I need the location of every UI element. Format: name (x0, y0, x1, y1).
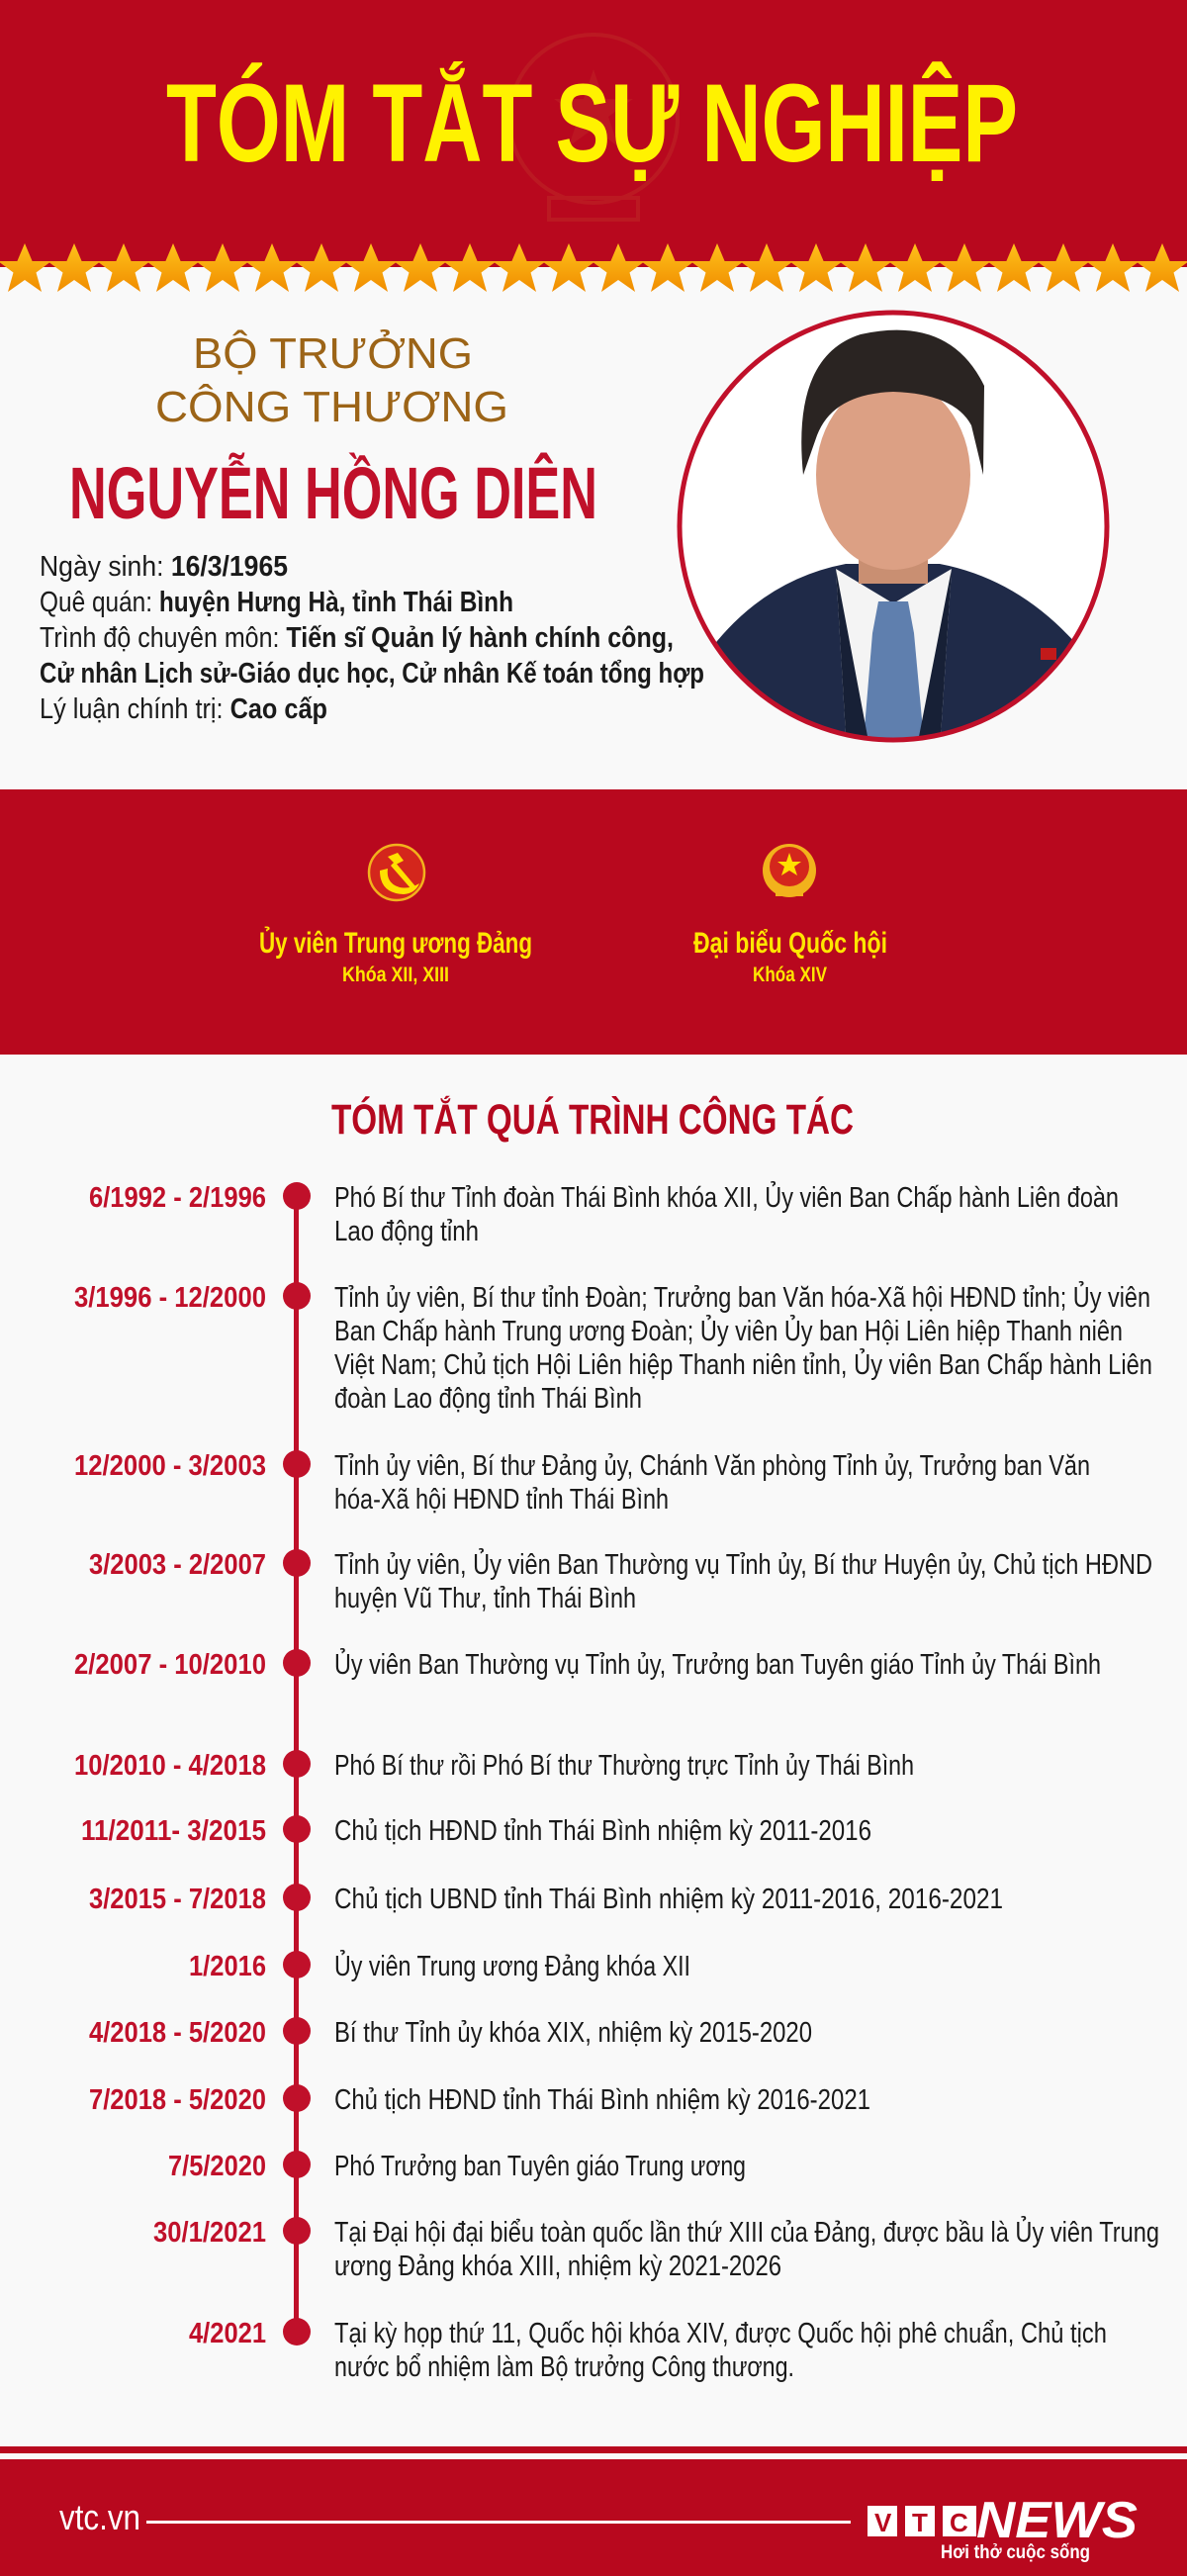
timeline descriptions: Lao động tỉnh (334, 1216, 479, 1247)
timeline descriptions (334, 1180, 1159, 2383)
label: party: Ủy viên Trung ương Đảng (259, 926, 532, 960)
portrait photo (680, 313, 1113, 752)
label: national assembly: Đại biểu Quốc hội (693, 927, 887, 960)
timeline descriptions: ương Đảng khóa XIII, nhiệm kỳ 2021-2026 (334, 2251, 781, 2282)
timeline descriptions: nước bổ nhiệm làm Bộ trưởng Công thương. (334, 2351, 794, 2383)
site url: vtc.vn (59, 2497, 140, 2537)
timeline dates: 3/2015 - 7/2018 (89, 1884, 266, 1915)
label: party: Khóa XII, XIII (342, 964, 449, 986)
name: NGUYỄN HỒNG DIÊN (69, 452, 597, 534)
titles band (0, 789, 1187, 1055)
label: party (259, 926, 532, 986)
personal info: Lý luận chính trị: Cao cấp (40, 693, 327, 725)
logo: VTC News: Hơi thở cuộc sống (941, 2542, 1090, 2563)
header band (0, 0, 1187, 267)
icon: party emblem (369, 845, 424, 900)
personal info: Trình độ chuyên môn: Tiến sĩ Quản lý hành chính công, (40, 622, 674, 654)
timeline dates: 3/2003 - 2/2007 (89, 1549, 266, 1581)
star row (0, 243, 1187, 292)
timeline dates: 11/2011- 3/2015 (81, 1815, 266, 1847)
logo: VTC News: V (874, 2508, 892, 2537)
position heading: BỘ TRƯỞNG (193, 327, 473, 378)
section heading: TÓM TẮT QUÁ TRÌNH CÔNG TÁC (331, 1095, 854, 1144)
label: national assembly: Khóa XIV (753, 964, 827, 986)
timeline descriptions: Bí thư Tỉnh ủy khóa XIX, nhiệm kỳ 2015-2020 (334, 2017, 812, 2049)
timeline dates: 4/2021 (189, 2318, 266, 2349)
personal info: Ngày sinh: 16/3/1965 (40, 551, 288, 583)
timeline descriptions: Ủy viên Trung ương Đảng khóa XII (334, 1949, 690, 1982)
timeline descriptions: hóa-Xã hội HĐND tỉnh Thái Bình (334, 1484, 669, 1516)
timeline dates: 30/1/2021 (153, 2217, 266, 2249)
timeline dates: 4/2018 - 5/2020 (89, 2017, 266, 2049)
personal info: Quê quán: huyện Hưng Hà, tỉnh Thái Bình (40, 587, 513, 618)
timeline dates: 2/2007 - 10/2010 (74, 1649, 266, 1681)
logo: VTC News: C (950, 2508, 968, 2537)
logo: VTC News: T (912, 2508, 928, 2537)
timeline dates: 10/2010 - 4/2018 (74, 1750, 266, 1782)
timeline descriptions: đoàn Lao động tỉnh Thái Bình (334, 1383, 642, 1415)
timeline dates (74, 1182, 266, 2349)
timeline descriptions: huyện Vũ Thư, tỉnh Thái Bình (334, 1583, 636, 1614)
watermark emblem (509, 35, 678, 220)
position heading (155, 327, 508, 431)
position heading: CÔNG THƯƠNG (155, 382, 508, 431)
timeline dates: 7/2018 - 5/2020 (89, 2084, 266, 2116)
timeline descriptions: Chủ tịch HĐND tỉnh Thái Bình nhiệm kỳ 2016-2021 (334, 2084, 870, 2116)
icon: national emblem (763, 844, 816, 897)
timeline dates: 3/1996 - 12/2000 (74, 1282, 266, 1314)
personal info (40, 551, 704, 725)
footer (0, 2446, 1187, 2576)
logo: VTC News: NEWS (976, 2492, 1138, 2549)
timeline descriptions: Chủ tịch HĐND tỉnh Thái Bình nhiệm kỳ 2011-2016 (334, 1815, 871, 1847)
timeline descriptions: Phó Trưởng ban Tuyên giáo Trung ương (334, 2151, 746, 2182)
timeline descriptions: Chủ tịch UBND tỉnh Thái Bình nhiệm kỳ 2011-2016, 2016-2021 (334, 1884, 1003, 1915)
timeline dates: 1/2016 (189, 1951, 266, 1982)
timeline dates: 6/1992 - 2/1996 (89, 1182, 266, 1214)
timeline (74, 1180, 1159, 2383)
timeline dates: 12/2000 - 3/2003 (74, 1450, 266, 1482)
timeline descriptions: Phó Bí thư rồi Phó Bí thư Thường trực Tỉnh ủy Thái Bình (334, 1750, 914, 1782)
timeline dates: 7/5/2020 (168, 2151, 266, 2182)
label: national assembly (693, 927, 887, 986)
personal info: Cử nhân Lịch sử-Giáo dục học, Cử nhân Kế toán tổng hợp (40, 658, 704, 690)
logo: VTC News (867, 2492, 1138, 2563)
